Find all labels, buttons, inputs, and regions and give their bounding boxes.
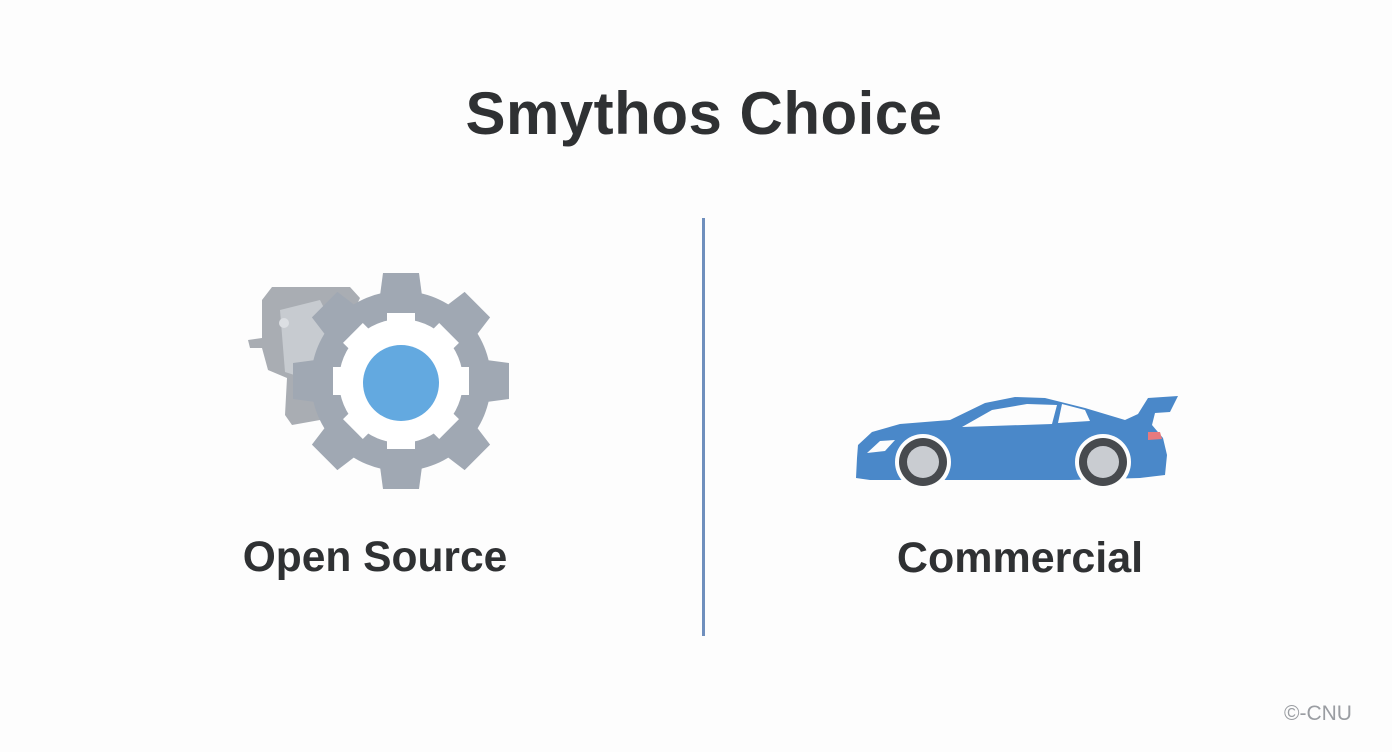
label: commercial: Commercial <box>897 534 1143 582</box>
divider <box>702 218 705 636</box>
watermark: ©-CNU <box>1284 702 1352 725</box>
back gear <box>248 287 360 425</box>
label: open source: Open Source <box>243 534 507 581</box>
icon: car <box>856 396 1178 486</box>
icon: gears <box>248 273 509 489</box>
front gear <box>293 273 509 489</box>
title: Smythos Choice <box>465 80 943 147</box>
